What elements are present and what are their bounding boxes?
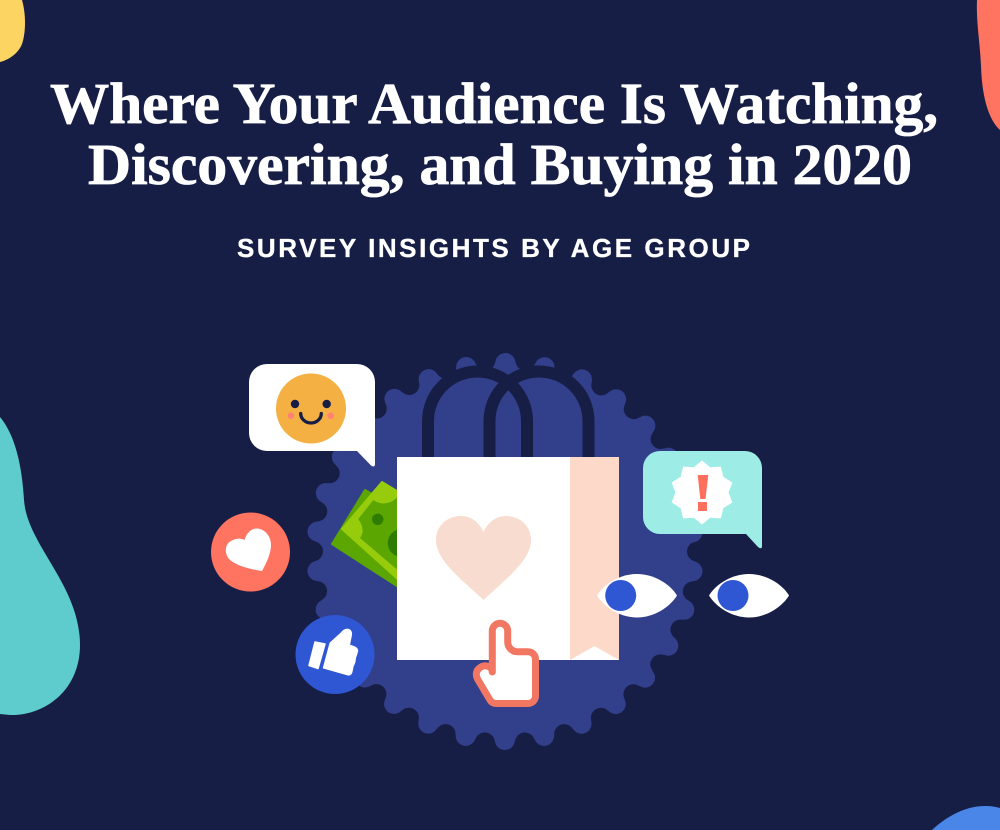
icon: bag heart	[436, 516, 531, 600]
icon: starburst	[672, 460, 732, 524]
illustration: shopping bag scene	[211, 344, 789, 759]
shopping bag body	[397, 457, 619, 660]
icon: left eye	[597, 574, 677, 618]
bag handles	[428, 372, 588, 460]
subtitle: SURVEY INSIGHTS BY AGE GROUP	[237, 233, 750, 263]
icon: right eye	[709, 574, 789, 618]
icon: pointing hand	[476, 623, 536, 704]
title: Where Your Audience Is Watching,	[50, 71, 938, 136]
speech bubble: alert	[643, 451, 762, 548]
icon: money bills	[332, 482, 420, 601]
icon: thumbs up	[296, 615, 374, 694]
title: Discovering, and Buying in 2020	[88, 132, 912, 197]
icon: exclamation mark	[698, 475, 708, 511]
blob: teal left	[0, 417, 80, 715]
icon: smiley face	[276, 374, 346, 444]
scalloped badge background	[298, 344, 712, 759]
blob: coral top right	[977, 0, 1000, 130]
blob: yellow top left	[0, 0, 25, 62]
icon: heart reaction	[211, 512, 290, 592]
title	[50, 71, 938, 197]
blob: blue bottom right	[932, 806, 1000, 830]
speech bubble: smiley	[249, 364, 375, 466]
